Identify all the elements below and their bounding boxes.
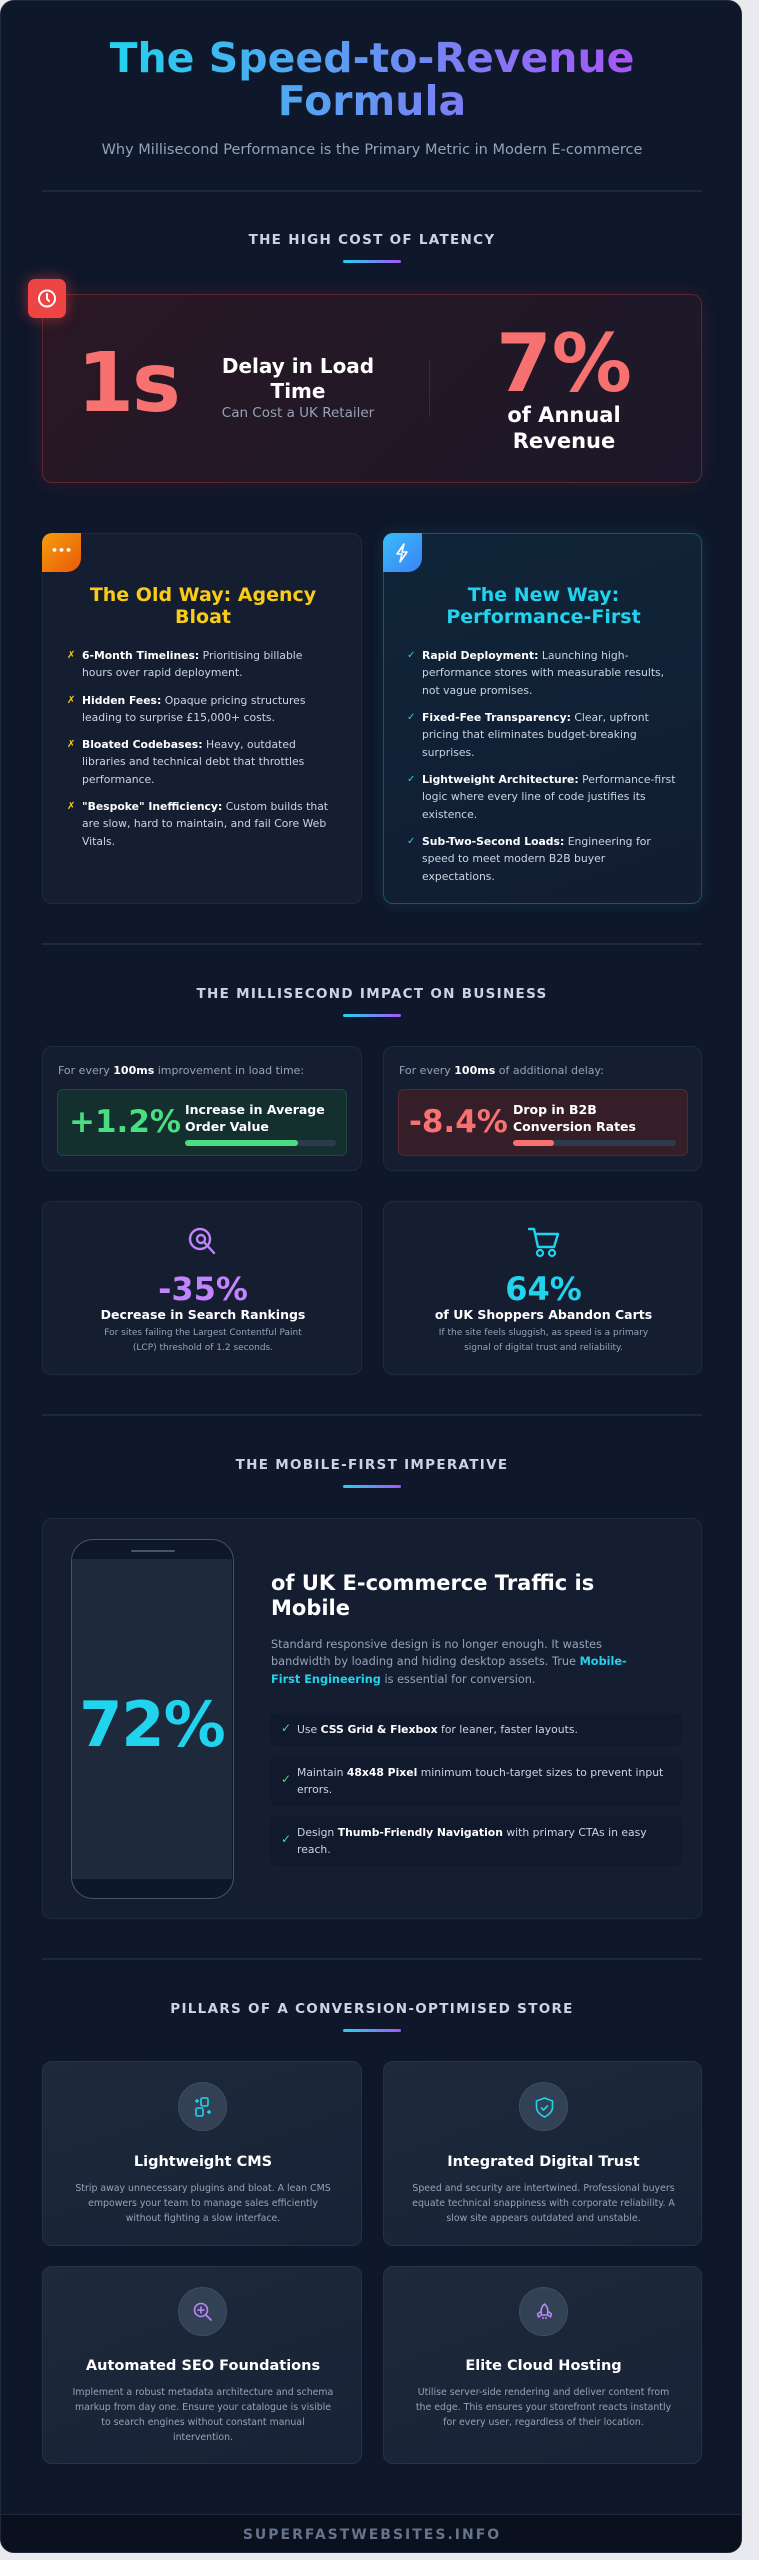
panel: SEO: to search engines without constant manual	[101, 2417, 305, 2428]
panel: improvement stat: For every 100ms improvement in load time:	[58, 1064, 304, 1077]
text: ✓	[281, 1772, 291, 1786]
panel: old way: Hidden Fees: Opaque pricing structures leading to surprise £15,000+ costs.	[82, 694, 305, 724]
panel: new way: ✓	[407, 650, 415, 661]
heading	[446, 584, 641, 628]
panel: old way: ✗	[67, 650, 75, 661]
panel: cloud hosting: for every user, regardless of their location.	[443, 2417, 644, 2428]
delay text: Time	[271, 379, 325, 403]
panel: search rankings	[42, 1201, 362, 1375]
panel: improvement stat	[42, 1046, 362, 1171]
icon: shield	[519, 2082, 568, 2131]
red stat box: Conversion Rates	[513, 1119, 636, 1134]
panel: cloud hosting	[383, 2266, 702, 2464]
panel: new way: Lightweight Architecture: Performance-first logic where every line of code justifies its existence.	[422, 773, 676, 821]
panel: SEO: markup from day one. Ensure your catalogue is visible	[75, 2402, 331, 2413]
panel: digital trust: equate technical snappiness with corporate reliability. A	[412, 2198, 675, 2209]
panel: cart abandonment	[383, 1201, 702, 1375]
heading: Bloat	[175, 606, 231, 628]
panel: new way: ✓	[407, 712, 415, 723]
panel: old way: ✗	[67, 739, 75, 750]
panel: delay stat: For every 100ms of additional delay:	[399, 1064, 604, 1077]
panel: cart abandonment: signal of digital trust and reliability.	[464, 1343, 623, 1353]
green stat box: Increase in Average	[185, 1102, 325, 1117]
panel: SEO	[42, 2266, 362, 2464]
icon: dots tab	[42, 533, 81, 572]
subtitle: Why Millisecond Performance is the Primary Metric in Modern E-commerce	[102, 142, 642, 158]
panel: lightweight CMS: without fighting a slow interface.	[126, 2213, 280, 2224]
delay text: Can Cost a UK Retailer	[222, 405, 374, 421]
list: mobile checks: Use CSS Grid & Flexbox for leaner, faster layouts.	[297, 1723, 578, 1736]
progress bar	[185, 1140, 336, 1146]
section heading: mobile-first: THE MOBILE-FIRST IMPERATIVE	[236, 1457, 508, 1473]
panel: lightweight CMS: Lightweight CMS	[134, 2154, 272, 2170]
heading	[90, 584, 316, 628]
phone graphic with 72%	[71, 1539, 234, 1899]
green stat box	[57, 1089, 347, 1156]
green stat box: Order Value	[185, 1119, 269, 1134]
section heading: millisecond impact: THE MILLISECOND IMPACT ON BUSINESS	[196, 986, 548, 1002]
red stat box: -8.4%	[409, 1104, 508, 1140]
mobile heading: of UK E-commerce Traffic is	[271, 1571, 594, 1595]
panel: mobile	[42, 1518, 702, 1919]
delay text	[222, 354, 374, 421]
panel: old way: Bloated Codebases: Heavy, outdated libraries and technical debt that throttles performance.	[82, 738, 304, 786]
panel: new way	[383, 533, 702, 904]
panel: lightweight CMS: Strip away unnecessary plugins and bloat. A lean CMS	[75, 2183, 331, 2194]
title: The Speed-to-Revenue	[110, 34, 634, 82]
big stat 1s: 1s	[77, 336, 179, 431]
progress bar	[513, 1140, 676, 1146]
revenue text	[507, 403, 621, 453]
panel: cart abandonment: of UK Shoppers Abandon Carts	[435, 1307, 652, 1322]
icon: zoom plus	[178, 2287, 227, 2336]
list: mobile checks: ✓	[281, 1721, 291, 1735]
bullets: Rapid Deployment: Launching high-performance stores with measurable results, not vague promises.	[422, 649, 664, 697]
panel: cart abandonment: 64%	[505, 1270, 582, 1308]
panel: old way: "Bespoke" Inefficiency: Custom builds that are slow, hard to maintain, and fail Core Web Vitals.	[82, 800, 328, 848]
delay text: Delay in Load	[222, 354, 374, 378]
panel: digital trust: slow site appears outdated and unstable.	[446, 2213, 641, 2224]
panel: old way: ✗	[67, 695, 75, 706]
panel: delay stat	[383, 1046, 702, 1171]
revenue text: Revenue	[513, 429, 615, 453]
red stat box	[398, 1089, 688, 1156]
heading: The Old Way: Agency	[90, 584, 316, 606]
panel: new way: ✓	[407, 836, 415, 847]
panel: digital trust: Speed and security are intertwined. Professional buyers	[412, 2183, 675, 2194]
panel: new way: Fixed-Fee Transparency: Clear, upfront pricing that eliminates budget-breaking surprises.	[422, 711, 649, 759]
panel: search rankings: For sites failing the Largest Contentful Paint	[104, 1328, 302, 1338]
icon: rocket	[519, 2287, 568, 2336]
icon: cart	[528, 1228, 560, 1258]
phone graphic with 72%: 72%	[79, 1688, 225, 1761]
red stat box: Drop in B2B	[513, 1102, 597, 1117]
mobile paragraph: Standard responsive design is no longer enough. It wastes bandwidth by loading and hiding desktop assets. True Mobile-First Engineering is essential for conversion.	[271, 1638, 627, 1686]
panel: SEO: Implement a robust metadata architecture and schema	[73, 2387, 333, 2398]
icon: magnifier	[188, 1228, 216, 1254]
heading: The New Way:	[468, 584, 619, 606]
mobile heading	[271, 1571, 594, 1620]
panel: SEO: intervention.	[173, 2432, 233, 2443]
section heading: high cost of latency: THE HIGH COST OF LATENCY	[249, 232, 495, 248]
list: mobile checks	[270, 1713, 682, 1746]
panel: new way: ✓	[407, 774, 415, 785]
green stat box: +1.2%	[69, 1104, 181, 1140]
icon: lightning tab	[383, 533, 422, 572]
panel: digital trust	[383, 2061, 702, 2246]
text: ✓	[281, 1832, 291, 1846]
bullets: 6-Month Timelines: Prioritising billable hours over rapid deployment.	[82, 649, 302, 679]
panel: lightweight CMS: empowers your team to manage sales efficiently	[88, 2198, 318, 2209]
mobile heading: Mobile	[271, 1596, 350, 1620]
icon: dots tab: •••	[51, 544, 72, 557]
panel: search rankings: -35%	[158, 1270, 248, 1308]
panel: old way	[42, 533, 362, 904]
panel: lightweight CMS	[42, 2061, 362, 2246]
heading: Performance-First	[446, 606, 641, 628]
icon: clock	[28, 279, 66, 318]
icon: blocks	[178, 2082, 227, 2131]
panel: old way: ✗	[67, 801, 75, 812]
text: Design Thumb-Friendly Navigation with primary CTAs in easy reach.	[297, 1826, 647, 1856]
panel: latency card	[42, 294, 702, 483]
panel: digital trust: Integrated Digital Trust	[447, 2154, 640, 2170]
title: Formula	[278, 77, 466, 125]
footer	[1, 2514, 743, 2554]
section heading: pillars: PILLARS OF A CONVERSION-OPTIMISED STORE	[170, 2001, 574, 2017]
footer: SUPERFASTWEBSITES.INFO	[243, 2527, 501, 2543]
panel: SEO: Automated SEO Foundations	[86, 2358, 320, 2374]
revenue text: of Annual	[507, 403, 621, 427]
panel: cloud hosting: the edge. This ensures your storefront reacts instantly	[416, 2402, 671, 2413]
big stat 7%: 7%	[496, 317, 632, 410]
title	[110, 34, 634, 125]
panel: cloud hosting: Elite Cloud Hosting	[465, 2358, 622, 2374]
panel: cart abandonment: If the site feels sluggish, as speed is a primary	[439, 1328, 648, 1338]
panel: search rankings: (LCP) threshold of 1.2 seconds.	[133, 1343, 273, 1353]
panel: cloud hosting: Utilise server-side rendering and deliver content from	[418, 2387, 669, 2398]
text: Maintain 48x48 Pixel minimum touch-target sizes to prevent input errors.	[297, 1766, 663, 1796]
panel: search rankings: Decrease in Search Rankings	[101, 1307, 305, 1322]
panel: new way: Sub-Two-Second Loads: Engineering for speed to meet modern B2B buyer expectations.	[422, 835, 651, 883]
